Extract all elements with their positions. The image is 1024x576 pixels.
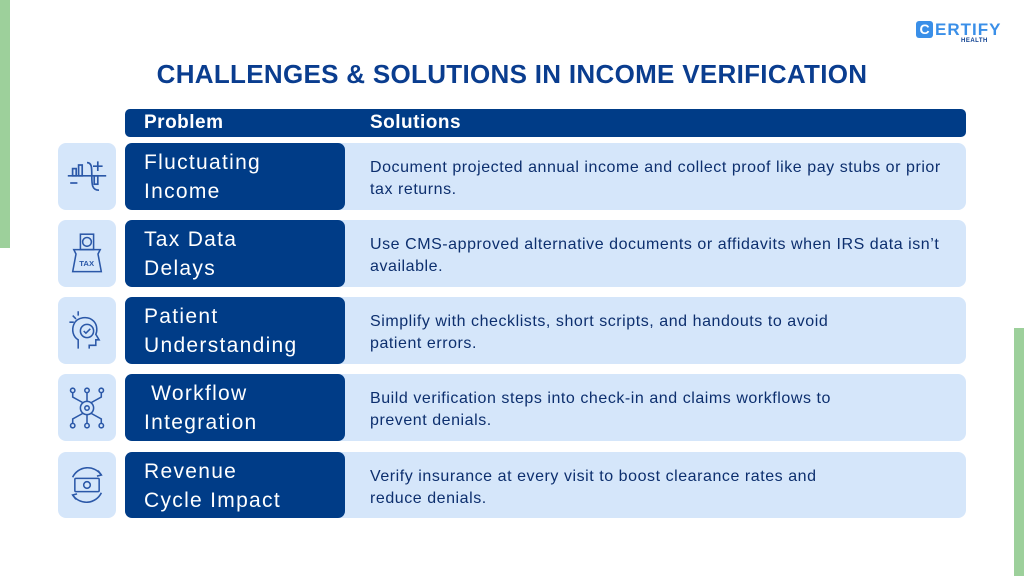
row 3: Simplify with checklists, short scripts, and handouts to avoid bbox=[370, 313, 828, 330]
row 3: patient errors. bbox=[370, 335, 477, 352]
row 1: Fluctuating bbox=[144, 151, 261, 174]
row 4 bbox=[58, 374, 966, 441]
row 2: Tax Data bbox=[144, 228, 237, 251]
title: CHALLENGES & SOLUTIONS IN INCOME VERIFICATION bbox=[157, 59, 867, 89]
logo: HEALTH bbox=[961, 38, 988, 44]
row 1 bbox=[58, 143, 966, 210]
row 5: Verify insurance at every visit to boost clearance rates and bbox=[370, 468, 817, 485]
row 1: Document projected annual income and collect proof like pay stubs or prior bbox=[370, 159, 941, 176]
table header bbox=[125, 109, 966, 137]
row 4: Integration bbox=[144, 411, 258, 434]
row 1: tax returns. bbox=[370, 181, 457, 198]
row 4: Build verification steps into check-in and claims workflows to bbox=[370, 390, 831, 407]
row 3: Understanding bbox=[144, 334, 298, 357]
table header: Solutions bbox=[370, 112, 461, 133]
logo bbox=[916, 20, 1001, 44]
row 1: Income bbox=[144, 180, 221, 203]
table header: Problem bbox=[144, 112, 224, 133]
left accent bar bbox=[0, 0, 10, 248]
row 4: Workflow bbox=[151, 382, 248, 405]
row 2: Delays bbox=[144, 257, 216, 280]
row 2: Use CMS-approved alternative documents or affidavits when IRS data isn’t bbox=[370, 236, 939, 253]
icon: workflow gear bbox=[58, 374, 116, 441]
row 4: prevent denials. bbox=[370, 412, 492, 429]
icon: tax bag bbox=[58, 220, 116, 287]
right accent bar bbox=[1014, 328, 1024, 576]
logo: ERTIFY bbox=[935, 20, 1001, 39]
row 2 bbox=[58, 220, 966, 287]
row 5: Cycle Impact bbox=[144, 489, 281, 512]
row 2: available. bbox=[370, 258, 443, 275]
icon: tax bag: TAX bbox=[79, 259, 95, 268]
logo: C bbox=[919, 21, 930, 37]
row 5: reduce denials. bbox=[370, 490, 487, 507]
icon: revenue cycle bbox=[58, 452, 116, 518]
row 3 bbox=[58, 297, 966, 364]
icon: chart bbox=[58, 143, 116, 210]
icon: head bbox=[58, 297, 116, 364]
row 5 bbox=[58, 452, 966, 518]
row 5: Revenue bbox=[144, 460, 237, 483]
row 3: Patient bbox=[144, 305, 218, 328]
